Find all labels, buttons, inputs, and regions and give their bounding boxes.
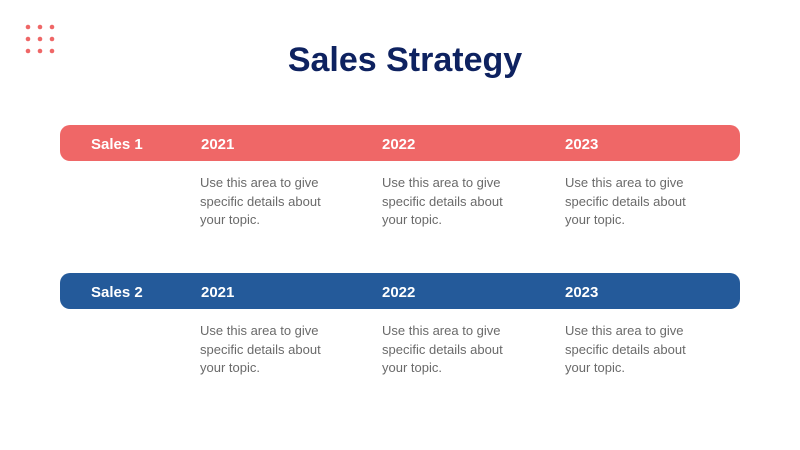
bar: Sales 2: 2023 [565,284,598,301]
icon: dot grid [26,24,54,54]
text row 1 [200,175,686,227]
bar: Sales 1: 2022 [382,136,415,153]
text row 2: Use this area to give specific details about your topic. [565,323,686,375]
bar: Sales 1: 2021 [201,136,234,153]
text row 2: Use this area to give specific details about your topic. [382,323,503,375]
bar: Sales 1: Sales 1 [91,136,143,153]
text row 1: Use this area to give specific details about your topic. [200,175,321,227]
bar: Sales 1: 2023 [565,136,598,153]
title: Sales Strategy [288,41,522,79]
text row 1: Use this area to give specific details about your topic. [565,175,686,227]
text row 2: Use this area to give specific details about your topic. [200,323,321,375]
text row 2 [200,323,686,375]
bar: Sales 2: Sales 2 [91,284,143,301]
bar: Sales 2 [60,273,740,309]
bar: Sales 2: 2022 [382,284,415,301]
bar: Sales 1 [60,125,740,161]
text row 1: Use this area to give specific details about your topic. [382,175,503,227]
bar: Sales 2: 2021 [201,284,234,301]
